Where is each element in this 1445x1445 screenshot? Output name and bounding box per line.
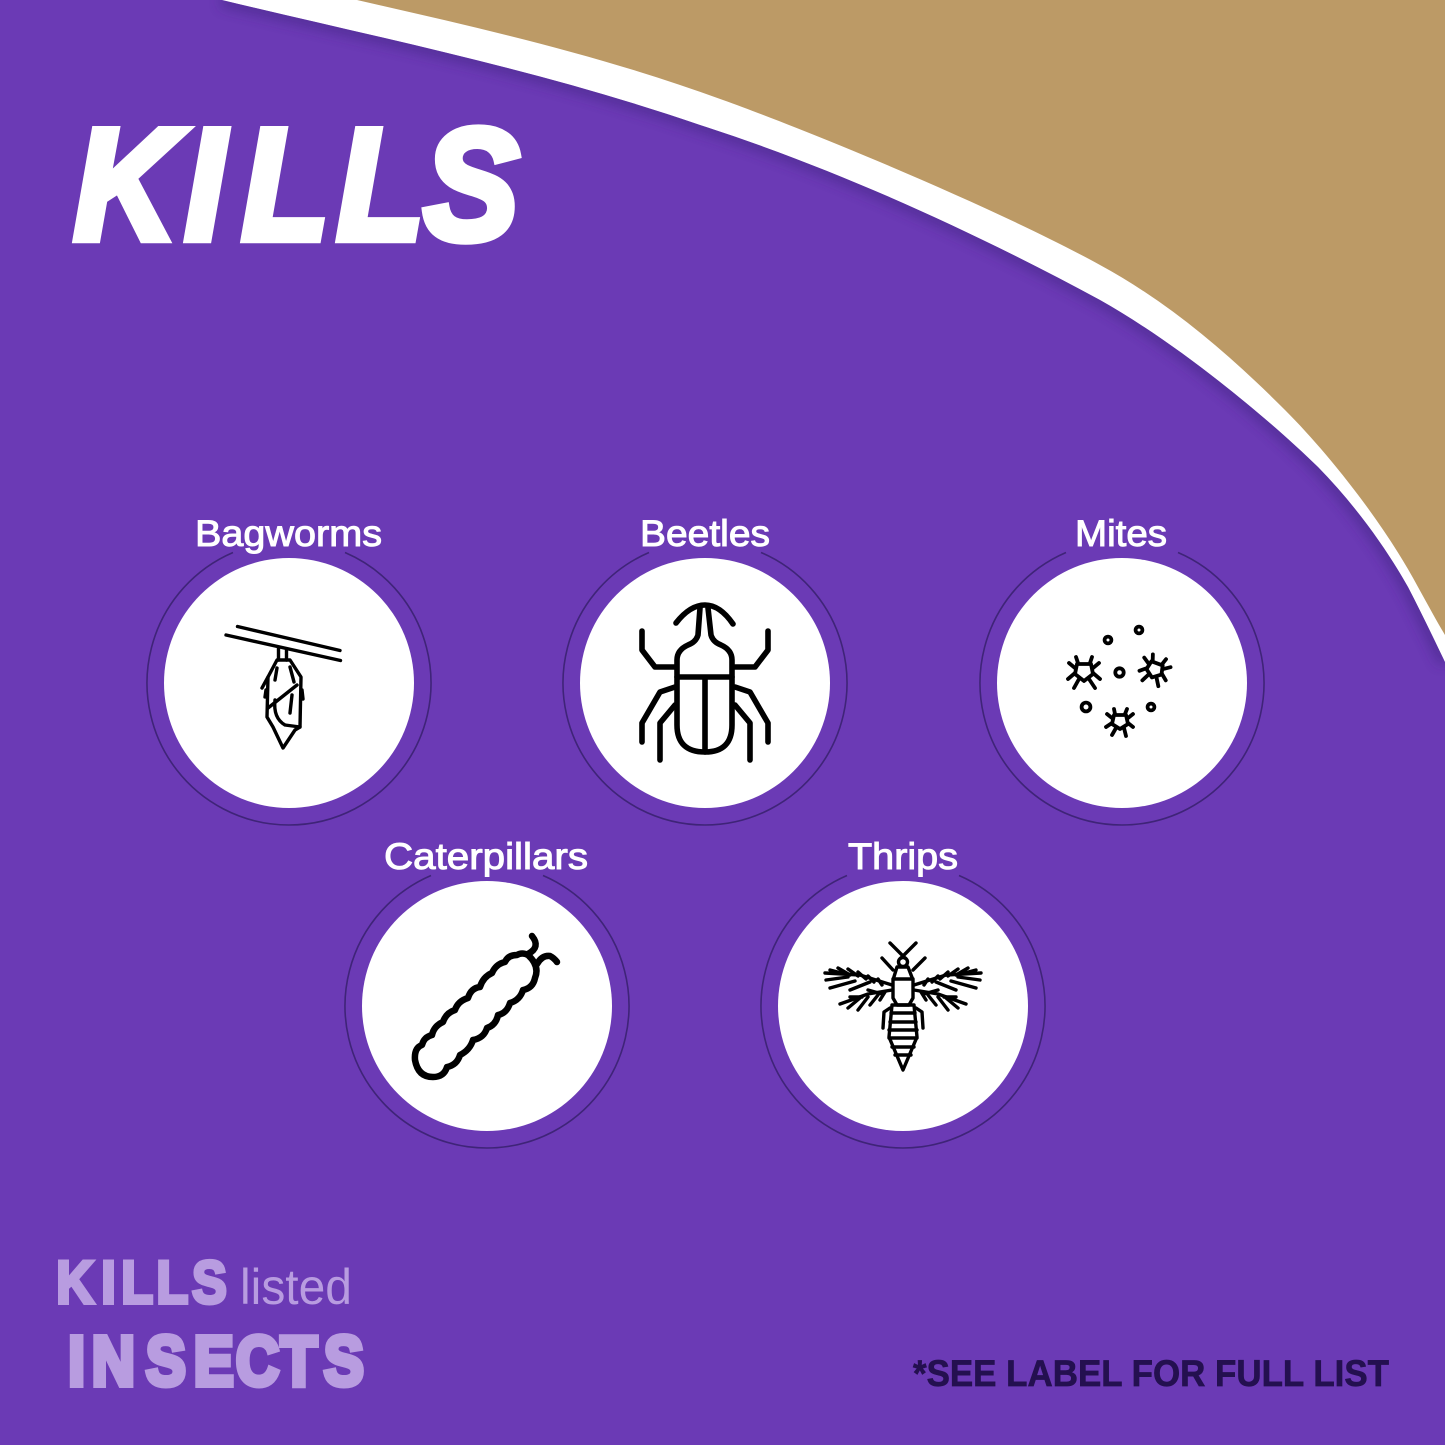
panel: Thrips (761, 836, 1045, 1148)
icon: bagworm cocoon (226, 626, 340, 748)
label: Beetles: Beetles (640, 513, 770, 554)
tagline word: listed: listed (240, 1259, 352, 1315)
title: KILLS: KILLS (74, 96, 519, 273)
ring: Thrips (761, 876, 1045, 1148)
label: Thrips: Thrips (848, 836, 958, 877)
label: Bagworms: Bagworms (195, 513, 382, 554)
tagline word: INSECTS: INSECTS (68, 1321, 364, 1400)
panel: Mites (980, 513, 1264, 825)
panel: Bagworms (147, 513, 431, 825)
white disc: Mites (997, 558, 1247, 808)
label: Caterpillars: Caterpillars (384, 836, 588, 877)
icon: caterpillar (415, 936, 557, 1077)
ring: Bagworms (147, 552, 431, 825)
ring: Mites (980, 552, 1264, 825)
icon: beetle (642, 605, 768, 760)
ring: Beetles (563, 552, 847, 825)
label: Mites: Mites (1075, 513, 1167, 554)
panel: Beetles (563, 513, 847, 825)
tagline: KILLS listed INSECTS (56, 1249, 364, 1400)
white disc: Caterpillars (362, 881, 612, 1131)
panel: Caterpillars (345, 836, 629, 1148)
tagline word: KILLS: KILLS (56, 1249, 227, 1316)
white disc: Bagworms (164, 558, 414, 808)
corner swoosh: white band and tan area (222, 0, 1445, 662)
icon: mites and eggs (1068, 627, 1173, 736)
white disc: Beetles (580, 558, 830, 808)
white disc: Thrips (778, 881, 1028, 1131)
ring: Caterpillars (345, 876, 629, 1148)
icon: thrips (825, 943, 981, 1070)
footnote: *SEE LABEL FOR FULL LIST (913, 1353, 1389, 1394)
